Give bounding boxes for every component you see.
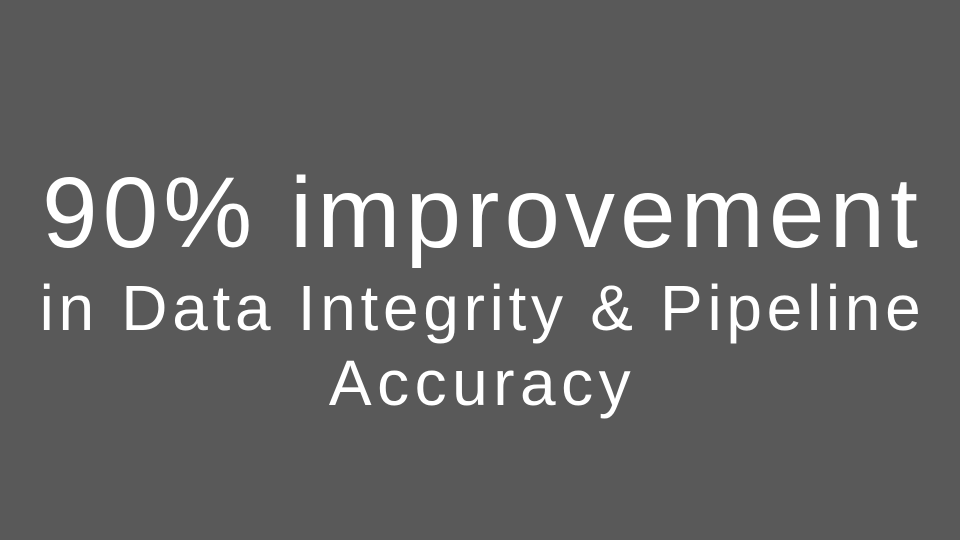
headline block (40, 157, 925, 419)
headline: big stat: 90% improvement (42, 157, 923, 269)
subheading line 1: in Data Integrity & Pipeline (40, 272, 925, 344)
subheading line 2: Accuracy (329, 347, 636, 419)
